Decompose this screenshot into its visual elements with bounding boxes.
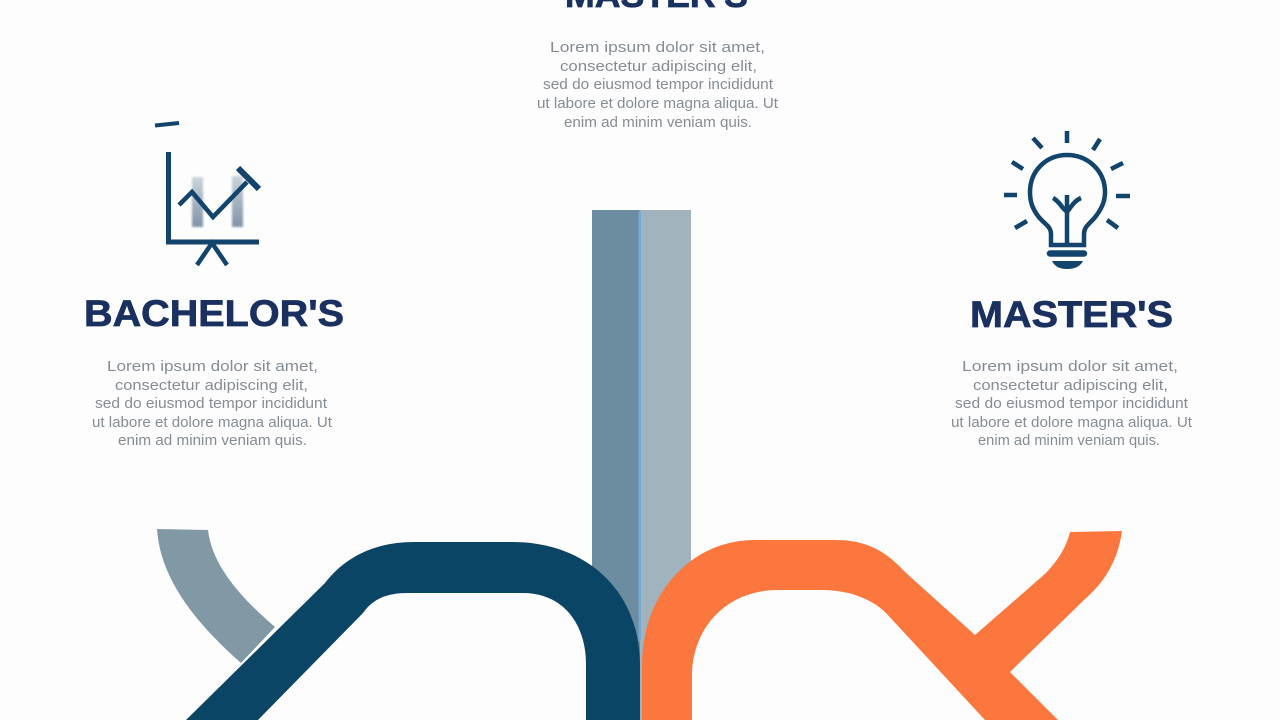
- text block: bachelor's: ut labore et dolore magna aliqua. Ut: [92, 414, 333, 431]
- text block: master's: ut labore et dolore magna aliqua. Ut: [951, 414, 1193, 431]
- text block: centre: ut labore et dolore magna aliqua. Ut: [537, 95, 779, 112]
- text block: bachelor's: sed do eiusmod tempor incididunt: [95, 395, 328, 412]
- orange ribbon: [642, 531, 1122, 720]
- navy ribbon: [186, 542, 640, 720]
- text block: centre: Lorem ipsum dolor sit amet,: [550, 39, 765, 56]
- text block: master's: [951, 358, 1193, 449]
- text block: centre: sed do eiusmod tempor incididunt: [543, 76, 774, 93]
- icon: light bulb: [1004, 131, 1130, 269]
- text block: bachelor's: enim ad minim veniam quis.: [118, 432, 307, 449]
- text block: bachelor's: consectetur adipiscing elit,: [115, 377, 308, 394]
- text block: master's: sed do eiusmod tempor incididunt: [955, 395, 1189, 412]
- icon: chart on presentation stand: [155, 123, 259, 265]
- left gray ribbon: [157, 529, 275, 663]
- text block: centre: enim ad minim veniam quis.: [564, 114, 752, 131]
- text block: centre: consectetur adipiscing elit,: [560, 58, 757, 75]
- text block: master's: enim ad minim veniam quis.: [978, 432, 1160, 449]
- central vertical bar: [592, 210, 691, 720]
- text block: master's: Lorem ipsum dolor sit amet,: [962, 358, 1178, 375]
- text block: centre: [537, 39, 779, 131]
- text block: bachelor's: Lorem ipsum dolor sit amet,: [107, 358, 318, 375]
- text block: bachelor's: [92, 358, 333, 449]
- heading: bachelor's: BACHELOR'S: [84, 293, 344, 334]
- text block: master's: consectetur adipiscing elit,: [973, 377, 1168, 394]
- heading: master's: MASTER'S: [970, 294, 1173, 335]
